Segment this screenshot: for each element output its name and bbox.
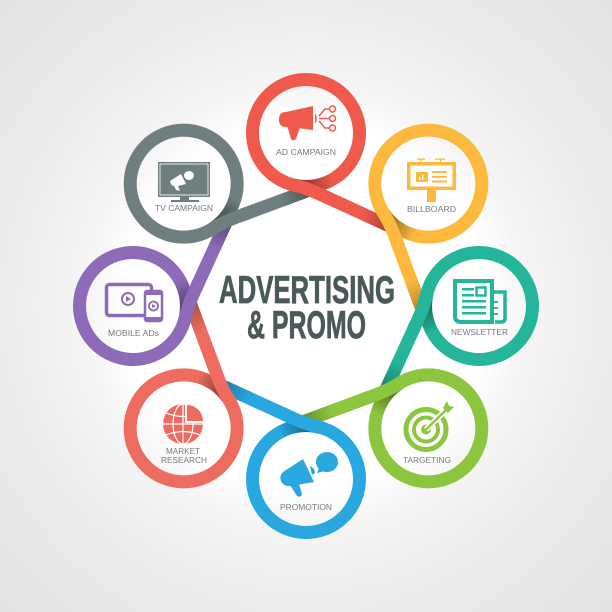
title: & PROMO [247, 304, 366, 347]
label: mobile ads: MOBILE ADs [108, 328, 159, 338]
icon: television [158, 162, 210, 202]
label: billboard: BILLBOARD [407, 204, 456, 214]
icon: billboard [407, 158, 456, 202]
panel: ad campaign [276, 106, 336, 157]
label: targeting: TARGETING [403, 455, 451, 465]
icon: globe with pie wedge [163, 400, 208, 444]
label: market research: RESEARCH [161, 455, 207, 465]
icon: tablet and phone [106, 284, 162, 321]
ribbon far segments [168, 168, 444, 444]
label: tv campaign: TV CAMPAIGN [155, 203, 213, 213]
panel: billboard [407, 158, 456, 214]
panel: promotion [280, 452, 338, 512]
ribbon rings [80, 80, 532, 532]
title: ADVERTISING [219, 269, 395, 312]
ribbon near segments [185, 185, 427, 427]
panel: market research [161, 400, 208, 465]
panel: mobile ads [106, 284, 162, 338]
panel: newsletter [451, 281, 508, 337]
label: ad campaign: AD CAMPAIGN [276, 147, 336, 157]
label: market research: MARKET [166, 446, 200, 456]
icon: newspaper [455, 281, 505, 322]
label: market research [161, 446, 207, 465]
label: promotion: PROMOTION [280, 502, 332, 512]
icon: megaphone with speech bubble [280, 452, 338, 497]
title [219, 269, 395, 347]
icon: target with arrow [406, 401, 454, 450]
panel: targeting [403, 401, 454, 465]
label: newsletter: NEWSLETTER [451, 327, 508, 337]
panel: tv campaign [155, 162, 213, 213]
icon: megaphone with nodes [279, 106, 336, 140]
